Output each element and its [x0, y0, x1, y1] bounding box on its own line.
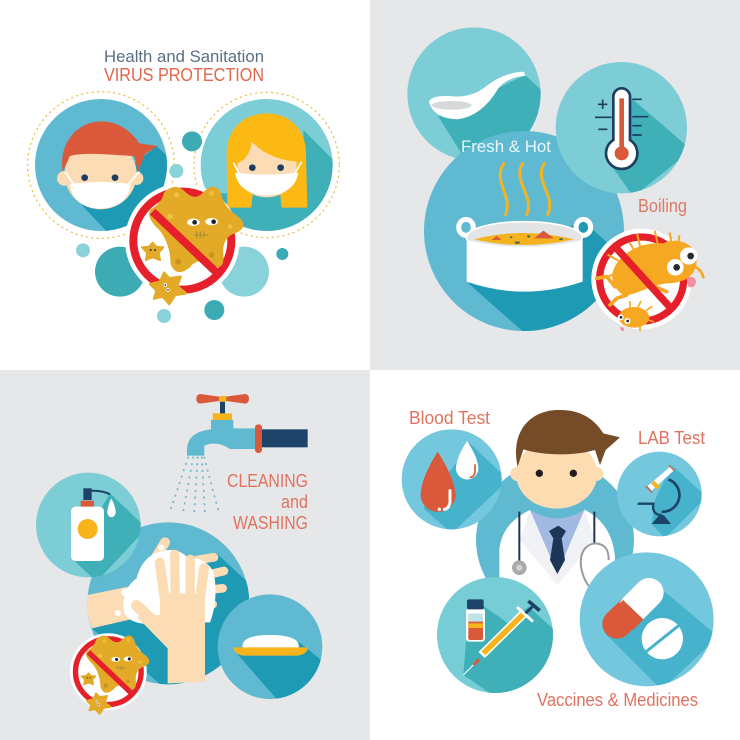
label: cleaning and washing: [227, 471, 308, 533]
label: fresh and hot: Fresh & Hot: [461, 137, 551, 156]
no-virus sign: [125, 183, 243, 304]
thermometer circle: [556, 62, 692, 197]
blood test circle: [402, 429, 508, 533]
title: Health and Sanitation: [104, 47, 264, 66]
no-virus sign: [70, 633, 149, 714]
boy with mask: [35, 99, 167, 231]
label: cleaning and washing: WASHING: [233, 513, 308, 533]
boiling artwork: [407, 27, 703, 333]
medical artwork: [402, 410, 718, 697]
dotted rings: [28, 92, 339, 238]
label: vaccines and medicines: Vaccines & Medicines: [537, 690, 698, 710]
label: blood test: Blood Test: [409, 408, 490, 428]
soap dish circle: [218, 594, 322, 699]
faucet: [170, 394, 308, 517]
label: boiling: Boiling: [638, 196, 687, 216]
label: cleaning and washing: CLEANING: [227, 471, 308, 491]
label: cleaning and washing: and: [281, 492, 308, 512]
vaccine circle: [437, 577, 558, 697]
panel: fresh and hot boiling: [407, 27, 703, 333]
doctor: [476, 410, 634, 627]
small bacterium: [618, 302, 653, 331]
pot circle: [424, 131, 633, 333]
virus protection artwork: [28, 92, 340, 323]
medicine circle: [580, 552, 718, 690]
bacterium: [597, 232, 703, 305]
panel: medical tests: [402, 408, 718, 710]
label: lab test: LAB Test: [638, 428, 705, 448]
panel: cleaning and washing: [36, 394, 332, 714]
vial: [466, 599, 485, 642]
steam: [500, 163, 550, 214]
title: VIRUS PROTECTION: [104, 65, 264, 85]
syringe: [463, 601, 540, 675]
girl with mask: [201, 99, 340, 237]
soup pot: [459, 219, 591, 292]
title: [104, 47, 264, 85]
lab test circle: [617, 452, 707, 538]
hands circle: [87, 522, 255, 687]
arm and hands: [87, 542, 224, 683]
no-bacteria sign: [591, 229, 703, 331]
decorative bubbles: [76, 131, 288, 323]
spoon circle: [407, 27, 547, 167]
panel: virus protection: [28, 47, 340, 323]
soap bottle circle: [36, 473, 147, 582]
washing artwork: [36, 394, 332, 714]
